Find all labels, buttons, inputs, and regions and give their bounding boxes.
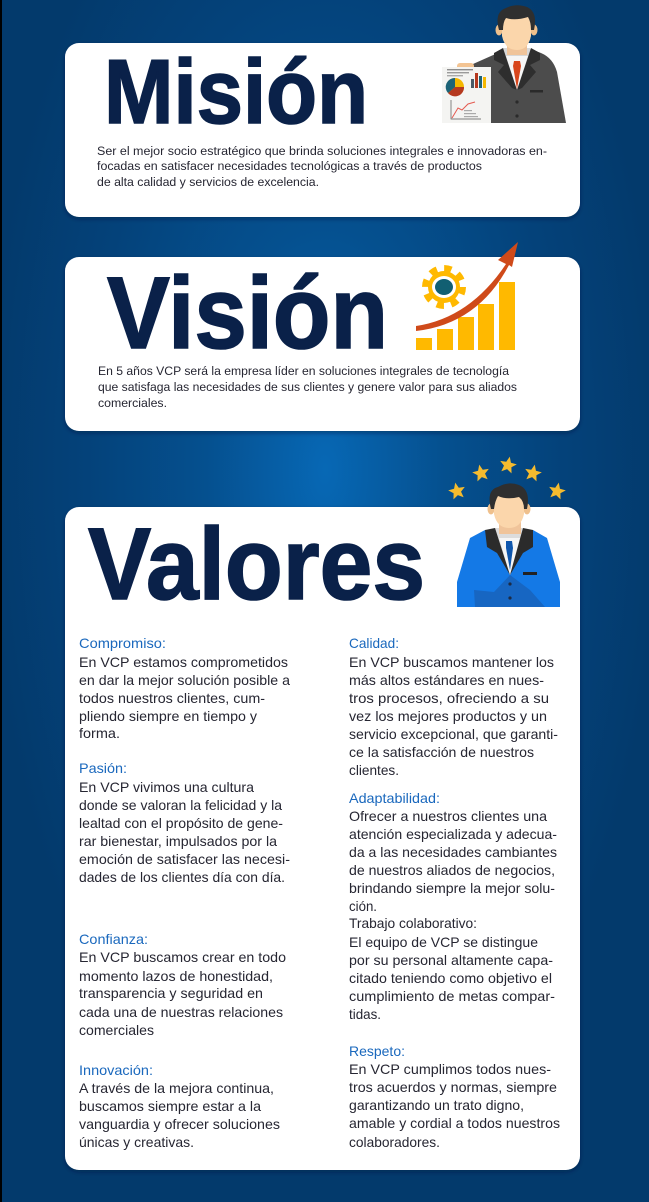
text block: trabajo colaborativo: cumplimiento de metas compar- — [349, 988, 555, 1004]
text block: respeto: colaboradores. — [349, 1134, 440, 1150]
text block: innovación: A través de la mejora continua, — [79, 1080, 274, 1096]
text block: visión: En 5 años VCP será la empresa líder en soluciones integrales de tecnología — [98, 364, 509, 378]
text block: calidad: tros procesos, ofreciendo a su — [349, 690, 549, 706]
text block: calidad: Calidad: — [349, 635, 399, 651]
text block: calidad — [349, 635, 558, 778]
text block: compromiso: Compromiso: — [79, 635, 166, 651]
text block: visión — [98, 364, 517, 410]
text block: pasión: donde se valoran la felicidad y la — [79, 797, 282, 813]
text block: misión: focadas en satisfacer necesidades tecnológicas a través de productos — [97, 159, 482, 173]
text block: compromiso: En VCP estamos comprometidos — [79, 654, 288, 670]
text block: respeto: garantizando un trato digno, — [349, 1097, 524, 1113]
panel: misión — [65, 5, 580, 217]
text block: visión: que satisfaga las necesidades de sus clientes y genere valor para sus aliados — [98, 380, 517, 394]
text block: respeto: tros acuerdos y normas, siempre — [349, 1079, 557, 1095]
text block: trabajo colaborativo: El equipo de VCP se distingue — [349, 934, 538, 950]
text block: adaptabilidad: Adaptabilidad: — [349, 790, 440, 806]
text block: misión: de alta calidad y servicios de excelencia. — [97, 175, 319, 189]
text block: respeto — [349, 1043, 560, 1150]
text block: calidad: clientes. — [349, 762, 399, 778]
text block: innovación — [79, 1062, 280, 1150]
text block: misión — [97, 144, 547, 189]
text block: respeto: amable y cordial a todos nuestros — [349, 1115, 560, 1131]
text block: adaptabilidad — [349, 790, 557, 914]
text block: trabajo colaborativo: citado teniendo como objetivo el — [349, 970, 552, 986]
text block: confianza: comerciales — [79, 1022, 154, 1038]
text block: confianza — [79, 931, 286, 1038]
heading: Valores: Valores — [88, 507, 425, 621]
text block: confianza: En VCP buscamos crear en todo — [79, 949, 286, 965]
text block: innovación: Innovación: — [79, 1062, 153, 1078]
text block: misión: Ser el mejor socio estratégico que brinda soluciones integrales e innovadoras en- — [97, 144, 547, 158]
heading: Visión: Visión — [107, 256, 388, 370]
text block: innovación: únicas y creativas. — [79, 1134, 194, 1150]
text block: confianza: cada una de nuestras relaciones — [79, 1004, 283, 1020]
text block: compromiso: todos nuestros clientes, cum- — [79, 690, 265, 706]
text block: adaptabilidad: de nuestros aliados de negocios, — [349, 862, 555, 878]
text block: adaptabilidad: brindando siempre la mejor solu- — [349, 880, 555, 896]
text block: compromiso — [79, 635, 290, 741]
text block: trabajo colaborativo: Trabajo colaborativo: — [349, 915, 477, 931]
text block: adaptabilidad: atención especializada y adecua- — [349, 826, 557, 842]
text block: respeto: Respeto: — [349, 1043, 405, 1059]
text block: innovación: vanguardia y ofrecer soluciones — [79, 1116, 280, 1132]
text block: pasión: rar bienestar, impulsados por la — [79, 833, 277, 849]
text block: compromiso: forma. — [79, 725, 120, 741]
text block: pasión: emoción de satisfacer las necesi- — [79, 851, 290, 867]
text block: adaptabilidad: Ofrecer a nuestros clientes una — [349, 808, 547, 824]
text block: confianza: Confianza: — [79, 931, 148, 947]
text block: pasión — [79, 760, 290, 885]
panel: valores — [65, 455, 580, 1170]
text block: calidad: vez los mejores productos y un — [349, 708, 547, 724]
icon: businessman with report — [442, 5, 566, 123]
text block: calidad: ce la satisfacción de nuestros — [349, 744, 534, 760]
text block: confianza: momento lazos de honestidad, — [79, 968, 273, 984]
text block: trabajo colaborativo: por su personal altamente capa- — [349, 952, 553, 968]
text block: confianza: transparencia y seguridad en — [79, 985, 263, 1001]
heading: Misión: Misión — [104, 42, 368, 143]
panel: visión — [65, 242, 580, 431]
text block: calidad: En VCP buscamos mantener los — [349, 654, 554, 670]
text block: pasión: dades de los clientes día con día. — [79, 869, 285, 885]
text block: visión: comerciales. — [98, 396, 167, 410]
icon: stars and businessman in blue — [447, 455, 567, 607]
text block: trabajo colaborativo: tidas. — [349, 1006, 381, 1022]
text block: respeto: En VCP cumplimos todos nues- — [349, 1061, 551, 1077]
text block: pasión: Pasión: — [79, 760, 127, 776]
text block: calidad: más altos estándares en nues- — [349, 672, 544, 688]
text block: calidad: servicio excepcional, que garanti- — [349, 726, 558, 742]
text block: pasión: lealtad con el propósito de gene- — [79, 815, 283, 831]
text block: compromiso: en dar la mejor solución posible a — [79, 672, 290, 688]
text block: adaptabilidad: ción. — [349, 898, 377, 914]
text block: trabajo colaborativo — [349, 915, 555, 1022]
text block: innovación: buscamos siempre estar a la — [79, 1098, 261, 1114]
text block: compromiso: pliendo siempre en tiempo y — [79, 708, 257, 724]
text block: adaptabilidad: da a las necesidades cambiantes — [349, 844, 557, 860]
icon: growth chart with gear — [416, 242, 518, 350]
text block: pasión: En VCP vivimos una cultura — [79, 779, 254, 795]
